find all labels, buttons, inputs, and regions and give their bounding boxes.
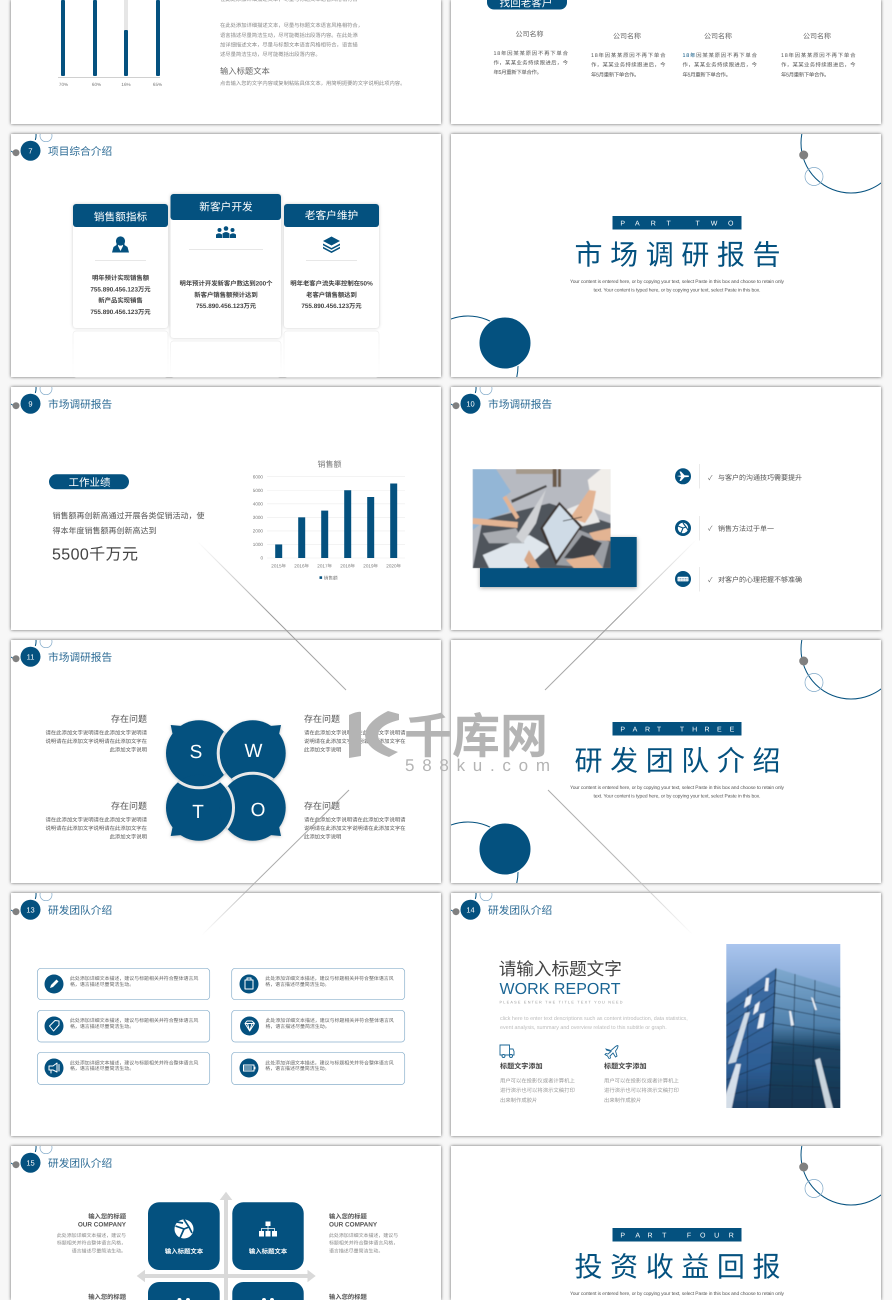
watermark logo: 千库网 — [404, 711, 548, 764]
box: pencil: 此处添加详细文本描述，建议与标题相关并符合整体语言风 — [70, 975, 198, 982]
tile: globe: 输入标题文本 — [165, 1247, 204, 1255]
card: retain old customers: 老客户销售额达到 — [306, 291, 357, 299]
card: sales target: 新产品实现销售 — [98, 296, 143, 304]
bar chart: sales: 2020年 — [386, 564, 402, 568]
text block: top left: 说明请在此添加文字说明请在此添加文字在 — [45, 738, 148, 745]
bar chart: sales — [253, 460, 405, 580]
bar chart: sales: 2019年 — [363, 564, 379, 568]
text block: top right: 存在问题 — [304, 714, 340, 724]
box: battery — [232, 1052, 405, 1084]
pill: work performance: 工作业绩 — [68, 477, 111, 489]
photo: glass building — [726, 944, 840, 1108]
slide heading: 研发团队介绍 — [488, 904, 552, 917]
slide 8: part two section cover — [418, 93, 892, 416]
card: new customer development: 新客户开发 — [199, 200, 253, 214]
slide heading: 市场调研报告 — [48, 651, 112, 664]
box: shopping bag — [232, 968, 405, 1000]
bar chart: sales: 3000 — [253, 515, 263, 520]
text block: top left: 请在此添加文字说明请在此添加文字说明请 — [45, 729, 148, 736]
tile: lower right — [232, 1282, 304, 1300]
blue block behind photo — [480, 537, 637, 587]
text block: bottom left: 请在此添加文字说明请在此添加文字说明请 — [45, 816, 148, 823]
company column 4: 年5月重新下单合作。 — [781, 72, 830, 78]
list item 3 — [699, 567, 802, 592]
progress bar chart — [58, 0, 162, 87]
pill: work performance — [49, 474, 129, 489]
slide 12: part three section cover — [418, 599, 892, 922]
card: retain old customers: 老客户维护 — [305, 209, 358, 222]
description text — [220, 0, 405, 87]
slide 16: part four section cover — [451, 1105, 892, 1300]
part label: PART TWO — [620, 220, 734, 228]
feature column 1: 进行演示也可以将演示文稿打印 — [500, 1087, 575, 1094]
number badge: 7 — [28, 146, 33, 155]
description text: 述尽量简洁生动，尽可能概括出段落内容。 — [220, 51, 321, 58]
list item 2: ✓ — [708, 526, 713, 533]
description text: 语言描述尽量简洁生动，尽可能概括出段落内容。在此处添 — [220, 32, 358, 39]
part label — [612, 1228, 742, 1242]
slide 6: win back old customers — [451, 0, 881, 124]
text block: top left: 此添加文字说明 — [110, 746, 147, 754]
bar chart: sales: 销售额 — [318, 460, 342, 469]
slide heading: 研发团队介绍 — [48, 904, 112, 917]
section subtitle — [570, 785, 785, 799]
company column 1: 年5月重新下单合作。 — [494, 69, 542, 76]
number badge: 13 — [26, 905, 35, 914]
text block: top right: 此添加文字说明 — [304, 746, 341, 754]
company column 2: 作，某某业务持续跟进后，今 — [591, 62, 666, 68]
watermark diagonal lines — [197, 540, 696, 935]
text block: bottom right — [304, 801, 406, 840]
card: sales target — [73, 204, 168, 328]
description text: 输入标题文本 — [220, 66, 270, 76]
feature column 1: 出来制作成胶片 — [500, 1097, 537, 1104]
number badge: 9 — [28, 399, 33, 408]
number badge: 10 — [466, 399, 475, 408]
section title: 市场调研报告 — [574, 240, 788, 270]
slide 10: market problems — [451, 383, 881, 630]
list item 3: 对客户的心理把握不够准确 — [718, 576, 802, 584]
company column 2 — [591, 32, 666, 78]
text: upper right: 输入您的标题 — [329, 1212, 367, 1220]
box: tag — [38, 1010, 210, 1042]
description — [500, 1016, 688, 1031]
text: upper left: OUR COMPANY — [78, 1222, 127, 1228]
box: megaphone: 此处添加详细文本描述，建议与标题相关并符合整体语言风 — [70, 1060, 198, 1066]
bar chart: sales: 1000 — [253, 542, 263, 547]
box: diamond: 格，语言描述尽量简洁生动。 — [266, 1023, 330, 1030]
feature column 1: 用户可以在投影仪或者计算机上 — [500, 1078, 575, 1085]
company column 4: 18年因某某原因不再下单合 — [781, 52, 856, 59]
icon: group — [216, 226, 236, 238]
watermark logo: 588ku.com — [405, 756, 550, 775]
company column 3: 公司名称 — [704, 32, 732, 40]
watermark logo — [349, 711, 550, 775]
box: shopping bag: 此处添加详细文本描述，建议与标题相关并符合整体语言风 — [265, 975, 394, 982]
icon: truck — [500, 1045, 514, 1058]
description: click here to enter text descriptions such as content introduction, data statistics, — [500, 1016, 688, 1022]
cross arrows — [137, 1192, 316, 1300]
section subtitle: text. Your content is typed here, or by copying your text, select Paste in this box. — [594, 793, 760, 799]
text: upper right: 此处添加详细文本描述，建议与 — [329, 1232, 398, 1239]
tile: org chart: 输入标题文本 — [249, 1247, 288, 1255]
company column 2: 年5月重新下单合作。 — [591, 72, 640, 78]
bar chart: sales: 2017年 — [317, 564, 333, 568]
tile: org chart — [232, 1202, 304, 1270]
company column 2: 公司名称 — [613, 32, 641, 40]
card: retain old customers — [284, 204, 379, 328]
text block: bottom right: 存在问题 — [304, 801, 340, 811]
bar chart: sales: 5000 — [253, 488, 263, 493]
feature column 1 — [500, 1062, 575, 1104]
slide heading: 项目综合介绍 — [48, 145, 112, 158]
card: retain old customers: 明年老客户流失率控制在50% — [290, 280, 373, 288]
number badge — [460, 900, 480, 920]
performance text: 得本年度销售额再创新高达到 — [52, 526, 156, 536]
section title: 投资收益回报 — [574, 1252, 788, 1282]
heading block: 请输入标题文字 — [499, 959, 622, 979]
bar chart: sales: 4000 — [253, 502, 263, 506]
text block: bottom left: 说明请在此添加文字说明请在此添加文字在 — [45, 825, 148, 832]
part label — [612, 216, 742, 230]
card: new customer development: 755.890.456.123万元 — [196, 303, 257, 310]
icon: layers — [323, 236, 340, 253]
card: sales target: 755.890.456.123万元 — [90, 309, 151, 316]
part label: PART FOUR — [620, 1232, 734, 1240]
text block: bottom left — [45, 801, 148, 840]
slide 13: team feature boxes — [11, 889, 441, 1136]
bar chart: sales: 6000 — [253, 474, 263, 480]
list item 2: 销售方法过于单一 — [718, 525, 774, 533]
box: shopping bag: 格，语言描述尽量简洁生动。 — [265, 981, 329, 988]
slide heading: 市场调研报告 — [488, 398, 552, 411]
section subtitle: text. Your content is typed here, or by copying your text, select Paste in this box. — [594, 287, 760, 293]
box: pencil: 格，语言描述尽量简洁生动。 — [70, 981, 134, 988]
heading block: WORK REPORT — [500, 981, 621, 998]
SWOT diagram: S — [190, 742, 202, 763]
number badge: 15 — [26, 1158, 35, 1167]
pill heading — [487, 0, 567, 10]
feature column 2: 出来制作成胶片 — [604, 1097, 641, 1104]
performance text: 5500千万元 — [52, 546, 138, 564]
box: pencil — [38, 968, 210, 1000]
slide 14: work report — [451, 889, 881, 1136]
box: megaphone — [38, 1052, 210, 1084]
card: sales target: 明年预计实现销售额 — [92, 274, 150, 282]
text block: top right: 说明请在此添加文字说明请在此添加文字在 — [304, 738, 406, 745]
icon: plane — [675, 468, 691, 484]
progress bar chart: 65% — [153, 82, 162, 87]
number badge — [20, 900, 40, 920]
progress bar chart: 60% — [92, 82, 101, 87]
section subtitle: Your content is entered here, or by copying your text, select Paste in this box and choose to retain only — [570, 785, 785, 791]
number badge — [20, 394, 40, 414]
SWOT diagram: O — [251, 800, 265, 821]
text block: bottom right: 此添加文字说明 — [304, 834, 341, 840]
slide 9: sales performance — [11, 383, 441, 630]
card reflections — [73, 331, 379, 377]
SWOT diagram: T — [192, 802, 204, 823]
icon: globe — [675, 520, 691, 536]
bar chart: sales: 2015年 — [271, 564, 287, 568]
slide heading: 市场调研报告 — [48, 398, 112, 411]
description text: 点击输入您的文字内容或复制粘贴具体文本，用简明扼要的文字说明此项内容。 — [220, 80, 405, 87]
box: battery: 格，语言描述尽量简洁生动。 — [265, 1065, 329, 1072]
tile: globe — [148, 1202, 220, 1270]
company column 3: 年5月重新下单合作。 — [682, 72, 731, 78]
card: sales target: 755.890.456.123万元 — [90, 286, 151, 294]
number badge — [20, 1153, 40, 1173]
performance text — [52, 512, 204, 564]
company column 1 — [494, 30, 569, 76]
box: tag: 格，语言描述尽量简洁生动。 — [70, 1023, 134, 1030]
slide 7: project overview — [11, 130, 441, 377]
progress bar chart: 70% — [59, 82, 68, 87]
card: new customer development — [170, 194, 281, 338]
bar chart: sales: 销售额 — [324, 575, 338, 580]
text block: bottom left: 存在问题 — [111, 801, 147, 811]
text block: top left: 存在问题 — [111, 714, 147, 724]
card: new customer development: 新客户销售额预计达到 — [194, 291, 258, 299]
icon: people — [112, 236, 129, 252]
slide heading: 研发团队介绍 — [48, 1157, 112, 1170]
heading block — [499, 959, 623, 1004]
tile: lower left — [148, 1282, 220, 1300]
text: upper left — [57, 1212, 127, 1254]
text: upper left: 标题相关并符合整体语言风格， — [57, 1240, 126, 1247]
company column 4: 公司名称 — [803, 32, 831, 40]
text: upper right: OUR COMPANY — [329, 1222, 378, 1228]
part label: PART THREE — [620, 726, 735, 734]
number badge: 11 — [27, 652, 34, 661]
section subtitle — [570, 279, 785, 293]
feature column 2: 进行演示也可以将演示文稿打印 — [604, 1087, 679, 1094]
list item 2 — [699, 516, 774, 540]
company column 1: 作，某某业务持续跟进后，今 — [494, 60, 569, 66]
icon: plane outline — [605, 1046, 618, 1058]
section subtitle: Your content is entered here, or by copying your text, select Paste in this box and choose to retain only — [570, 1291, 785, 1297]
text: upper right: 标题相关并符合整体语言风格， — [329, 1240, 398, 1247]
number badge — [20, 141, 40, 161]
performance text: 销售额再创新高通过开展各类促销活动，使 — [52, 512, 204, 520]
text: upper left: 此处添加详细文本描述，建议与 — [57, 1232, 126, 1239]
number badge — [460, 394, 480, 414]
company column 3 — [682, 32, 758, 78]
description text: 加详细描述文本，尽量与标题文本语言风格相符合，语言描 — [220, 42, 358, 48]
company column 4: 作，某某业务持续跟进后，今 — [781, 62, 856, 68]
number badge — [20, 647, 40, 667]
box: tag: 此处添加详细文本描述，建议与标题相关并符合整体语言风 — [70, 1017, 198, 1024]
text: upper right: 语言描述尽量简洁生动。 — [329, 1247, 383, 1254]
section subtitle: Your content is entered here, or by copying your text, select Paste in this box and choose to retain only — [570, 279, 785, 285]
text: upper left: 语言描述尽量简洁生动。 — [72, 1247, 126, 1254]
SWOT diagram: W — [245, 741, 263, 762]
description: event analysis, summary and overview related to this subtitle or graph. — [500, 1025, 667, 1031]
text: upper left: 输入您的标题 — [88, 1212, 127, 1220]
slide 5: bar chart and text (cropped at top) — [11, 0, 441, 124]
list item 1: 与客户的沟通技巧需要提升 — [718, 474, 802, 482]
box: megaphone: 格，语言描述尽量简洁生动。 — [70, 1065, 134, 1072]
box: battery: 此处添加详细文本描述，建议与标题相关并符合整体语言风 — [265, 1060, 394, 1066]
company column 3: 作，某某业务持续跟进后，今 — [682, 62, 758, 68]
feature column 2: 用户可以在投影仪或者计算机上 — [604, 1078, 679, 1085]
feature column 2 — [604, 1062, 679, 1104]
number badge: 14 — [466, 905, 475, 914]
progress bar chart: 16% — [121, 82, 131, 87]
description text: 在此处添加详细描述文本，尽量与标题文本语言风格相符合， — [220, 22, 363, 29]
company column 1: 18年因某某原因不再下单合 — [494, 50, 569, 57]
card: sales target: 销售额指标 — [94, 212, 148, 224]
heading block: PLEASE ENTER THE TITLE TEXT YOU NEED — [500, 1000, 623, 1004]
slide 11: SWOT — [11, 636, 441, 883]
text block: top right — [304, 714, 406, 754]
section title: 研发团队介绍 — [574, 746, 788, 776]
text block: bottom right: 说明请在此添加文字说明请在此添加文字在 — [304, 825, 406, 832]
photo: team with laptops — [472, 469, 611, 568]
card: retain old customers: 755.890.456.123万元 — [301, 303, 362, 310]
card: new customer development: 明年预计开发新客户数达到200个 — [179, 280, 273, 288]
text block: bottom right: 请在此添加文字说明请在此添加文字说明请 — [304, 816, 406, 823]
company column 3: 18年因某某原因不再下单合 — [682, 52, 758, 59]
company column 2: 18年因某某原因不再下单合 — [591, 52, 666, 59]
part label — [612, 722, 742, 736]
box: diamond — [232, 1010, 405, 1042]
feature column 2: 标题文字添加 — [604, 1062, 647, 1070]
text block: top right: 请在此添加文字说明请在此添加文字说明请 — [304, 729, 406, 736]
list item 3: ✓ — [708, 577, 713, 584]
company column 4 — [781, 32, 856, 78]
text block: top left — [45, 714, 148, 754]
list item 1 — [699, 464, 802, 488]
bar chart: sales: 0 — [260, 556, 263, 561]
icon: keyboard — [675, 571, 691, 587]
feature column 1: 标题文字添加 — [500, 1062, 543, 1070]
text: upper right — [329, 1212, 398, 1254]
text block: bottom left: 此添加文字说明 — [110, 834, 147, 840]
bar chart: sales: 2016年 — [294, 564, 310, 568]
bar chart: sales: 2018年 — [340, 564, 356, 568]
bar chart: sales: 2000 — [253, 528, 263, 534]
company column 1: 公司名称 — [516, 30, 544, 38]
list item 1: ✓ — [708, 475, 713, 482]
slide 15: quadrant — [11, 1142, 441, 1300]
SWOT diagram — [164, 719, 287, 842]
box: diamond: 此处添加详细文本描述，建议与标题相关并符合整体语言风 — [266, 1017, 394, 1024]
